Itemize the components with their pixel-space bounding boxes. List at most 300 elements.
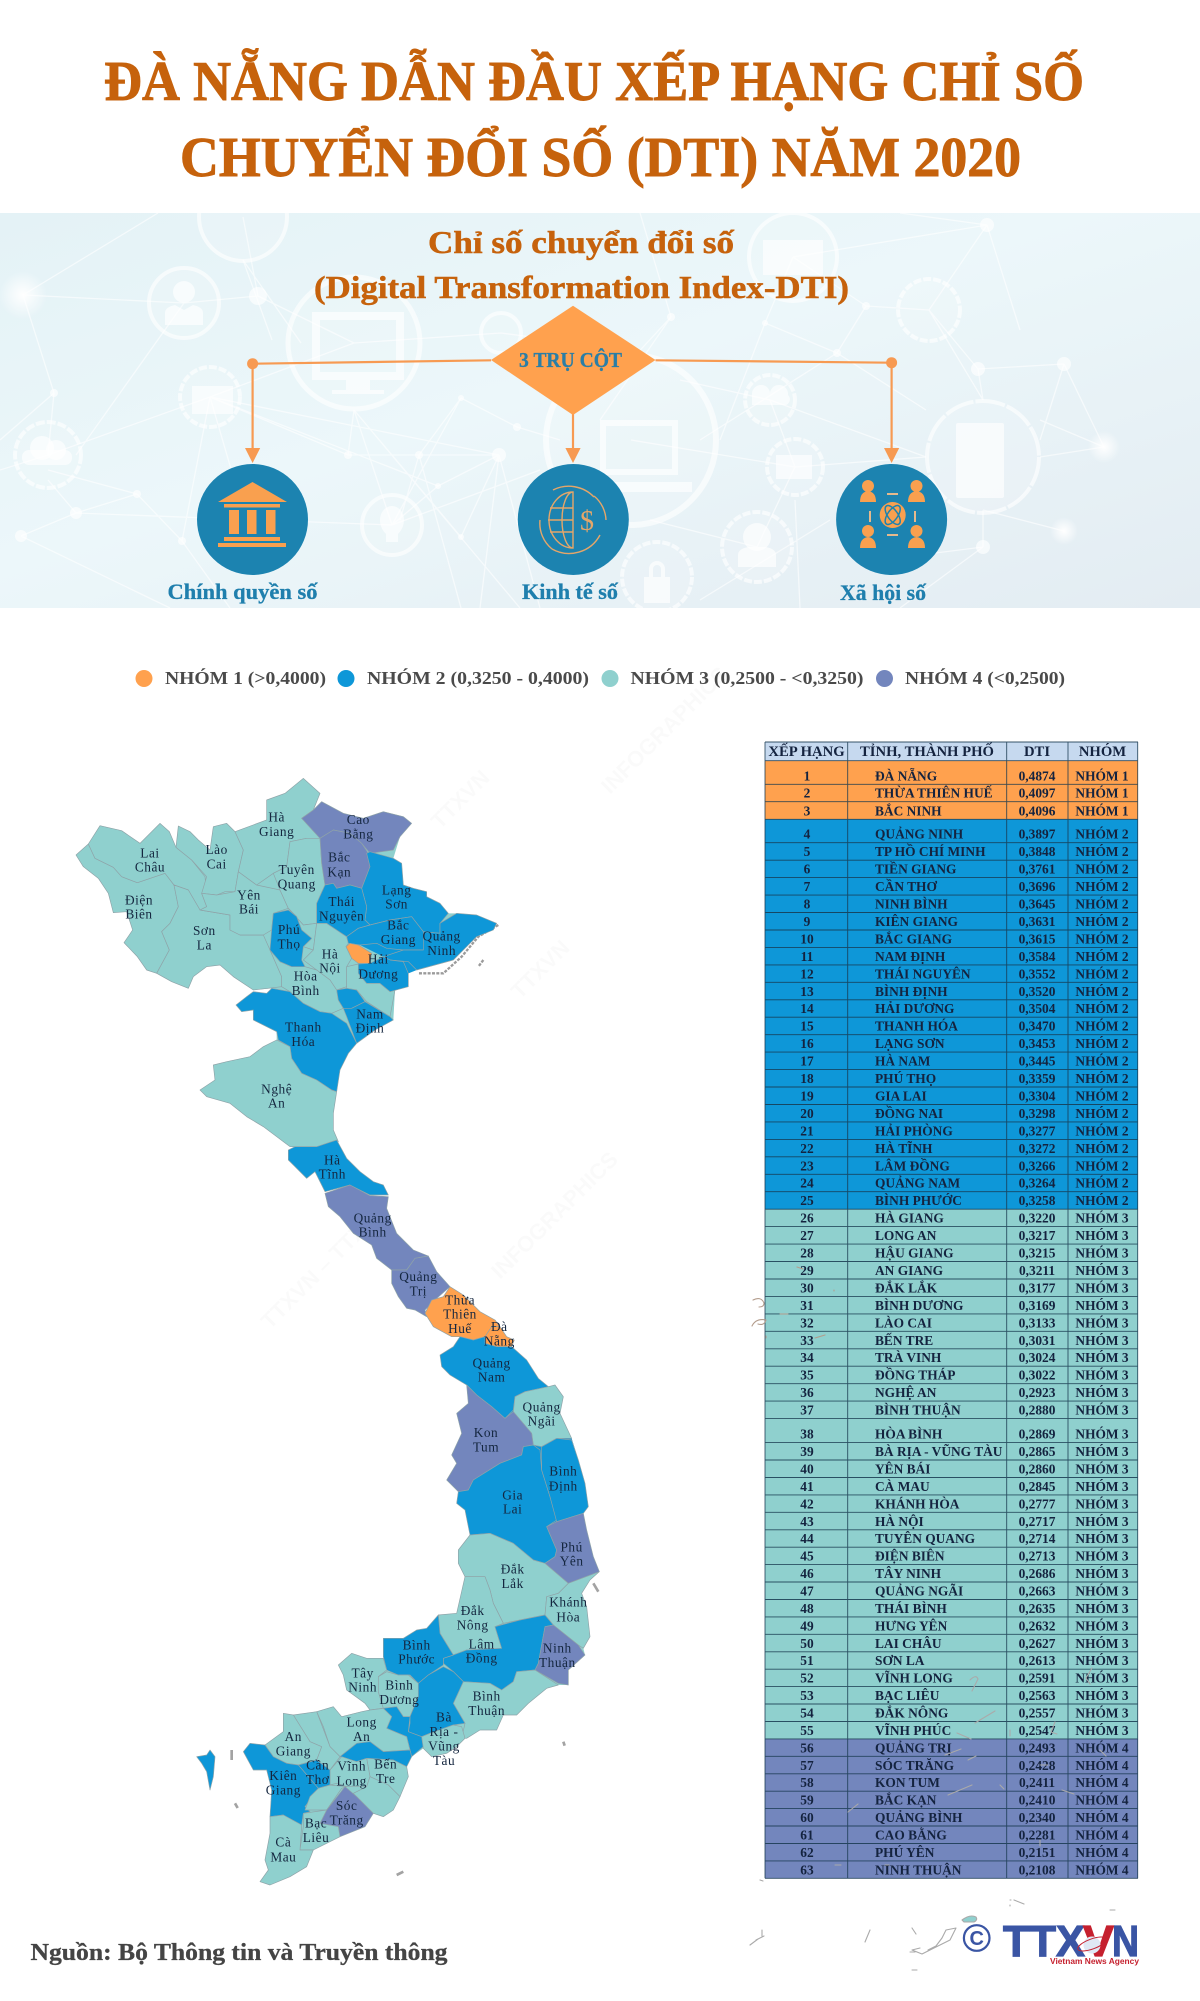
table rows: group 3: NHÓM 3 bbox=[1075, 1671, 1129, 1686]
subtitle: (Digital Transformation Index-DTI) bbox=[314, 269, 849, 305]
table rows: group 3: 37 bbox=[800, 1403, 814, 1418]
table rows: group 3: NHÓM 3 bbox=[1075, 1531, 1129, 1546]
map of Vietnam by province bbox=[76, 778, 599, 1885]
map labels: south: Bà bbox=[436, 1710, 452, 1725]
table rows: group 4: KON TUM bbox=[875, 1775, 940, 1790]
table rows: group 3: BẠC LIÊU bbox=[875, 1688, 940, 1703]
map labels: north: Kạn bbox=[327, 864, 351, 879]
table rows: group 2: NHÓM 2 bbox=[1075, 827, 1129, 842]
province: Tuyên Quang bbox=[273, 838, 325, 925]
table rows: group 2: NHÓM 2 bbox=[1075, 1176, 1129, 1191]
map labels: south: Tàu bbox=[433, 1753, 455, 1768]
table rows: group 2: 0,3761 bbox=[1019, 862, 1055, 877]
archipelago: Quảng Ninh islands bbox=[418, 925, 498, 973]
table rows: group 1: BẮC NINH bbox=[875, 803, 942, 818]
table rows: group 2: 0,3696 bbox=[1019, 879, 1056, 894]
table rows: group 3: 29 bbox=[800, 1263, 814, 1278]
map labels: centre bbox=[319, 1152, 584, 1569]
province: Hà Giang bbox=[235, 778, 320, 885]
table rows: group 2: 0,3631 bbox=[1019, 914, 1055, 929]
province: Hưng Yên, Thái Bình bbox=[347, 964, 395, 1017]
table rows: group 3: 35 bbox=[800, 1368, 814, 1383]
table rows: group 2: CẦN THƠ bbox=[875, 879, 937, 894]
watermarks: INFOGRAPHICS bbox=[596, 662, 733, 799]
table rows: group 2: LÂM ĐỒNG bbox=[875, 1158, 950, 1173]
province: TP Hồ Chí Minh bbox=[383, 1707, 423, 1757]
table rows: group 3: NHÓM 3 bbox=[1075, 1618, 1129, 1633]
province: Nghệ An bbox=[200, 1040, 338, 1148]
province: An Giang bbox=[265, 1713, 322, 1765]
table rows: group 2: NHÓM 2 bbox=[1075, 1106, 1129, 1121]
silhouette: Red River delta blue cluster bbox=[347, 913, 467, 992]
province: Cà Mau bbox=[260, 1815, 313, 1885]
table rows: group 3: 47 bbox=[800, 1584, 814, 1598]
subtitle bbox=[314, 224, 849, 305]
table rows: group 3: NHÓM 3 bbox=[1075, 1601, 1129, 1616]
silhouette: central landmass bbox=[447, 1385, 588, 1563]
map labels: south: Long bbox=[347, 1715, 377, 1730]
map labels: centre: Kon bbox=[474, 1425, 498, 1440]
map labels: south: Rịa - bbox=[430, 1724, 458, 1739]
table rows: group 3: 0,2591 bbox=[1019, 1671, 1055, 1686]
table rows: group 3: NGHỆ AN bbox=[875, 1385, 937, 1400]
table rows: group 1: 1 bbox=[804, 768, 810, 784]
table rows: group 3: LONG AN bbox=[875, 1228, 937, 1243]
province: Quảng Bình bbox=[325, 1185, 428, 1270]
map labels: centre: Thừa bbox=[445, 1292, 475, 1307]
map labels: north: Hà bbox=[268, 810, 285, 825]
islands: Hoàng Sa bbox=[752, 1267, 834, 1338]
table rows: group 2: NHÓM 2 bbox=[1075, 949, 1129, 964]
table rows: group 3: NHÓM 3 bbox=[1075, 1368, 1129, 1383]
table rows: group 3: NHÓM 3 bbox=[1075, 1315, 1129, 1330]
table rows: group 3: 53 bbox=[800, 1688, 814, 1703]
table rows: group 2: 20 bbox=[800, 1106, 814, 1121]
province: Khánh Hòa bbox=[545, 1572, 599, 1648]
table rows: group 3: NHÓM 3 bbox=[1075, 1653, 1129, 1668]
province: Trà Vinh bbox=[353, 1777, 400, 1817]
map labels: centre: Tĩnh bbox=[319, 1167, 346, 1182]
map labels: south: Đồng bbox=[466, 1651, 498, 1666]
map labels: south: Trăng bbox=[330, 1813, 364, 1828]
table rows: group 3: 0,2563 bbox=[1019, 1688, 1056, 1703]
map labels: north: Quang bbox=[278, 876, 316, 891]
table rows: group 2: HÀ TĨNH bbox=[875, 1141, 933, 1156]
table rows: group 1: THỪA THIÊN HUẾ bbox=[875, 786, 993, 801]
table rows: group 3: 36 bbox=[800, 1385, 814, 1400]
table rows: group 3: 45 bbox=[800, 1549, 814, 1564]
map labels: north: Bái bbox=[239, 902, 259, 917]
table rows: group 4: 58 bbox=[800, 1775, 814, 1790]
table rows: group 3: 54 bbox=[800, 1706, 814, 1720]
table rows: group 3: 0,3215 bbox=[1019, 1246, 1056, 1260]
map labels: centre: Lai bbox=[503, 1502, 522, 1517]
title bbox=[104, 47, 1084, 189]
table rows: group 3: LÀO CAI bbox=[875, 1315, 932, 1330]
province: Bình Phước bbox=[383, 1615, 453, 1683]
table rows: group 4: PHÚ YÊN bbox=[875, 1845, 935, 1860]
province: Hà Nội bbox=[303, 923, 352, 990]
table rows: group 2: 0,3304 bbox=[1019, 1088, 1056, 1104]
table rows: group 3: 33 bbox=[800, 1333, 814, 1348]
province: Đà Nẵng bbox=[485, 1327, 514, 1347]
table rows: group 3: LAI CHÂU bbox=[875, 1636, 942, 1651]
table rows: group 3: THÁI BÌNH bbox=[875, 1601, 947, 1616]
table backgrounds bbox=[765, 742, 1138, 1878]
table rows: group 4: 0,2281 bbox=[1019, 1828, 1055, 1842]
table rows: group 3: NHÓM 3 bbox=[1075, 1350, 1129, 1365]
pillar: Kinh tế số: Kinh tế số bbox=[522, 579, 619, 604]
table rows: group 2: 13 bbox=[800, 984, 814, 999]
province: Hải Dương, Hải Phòng bbox=[358, 957, 408, 992]
map labels: south: Long bbox=[337, 1773, 367, 1788]
table rows: group 2: TIỀN GIANG bbox=[875, 862, 957, 877]
table rows: group 3: 0,2714 bbox=[1019, 1531, 1056, 1546]
table rows: group 3: 28 bbox=[800, 1246, 814, 1260]
table rows: group 2: 0,3645 bbox=[1019, 896, 1056, 912]
table rows: group 2: QUẢNG NAM bbox=[875, 1176, 961, 1191]
table rows: group 3: 0,3220 bbox=[1019, 1211, 1056, 1226]
map labels: south: Hòa bbox=[556, 1609, 580, 1624]
table rows: group 2: 0,3615 bbox=[1019, 931, 1056, 946]
legend: NHÓM 4 (<0,2500) bbox=[905, 667, 1065, 689]
table rows: group 2: 18 bbox=[800, 1071, 814, 1086]
table rows: group 4: NHÓM 4 bbox=[1075, 1828, 1129, 1842]
province: Cần Thơ bbox=[298, 1760, 330, 1788]
table rows: group 3: KHÁNH HÒA bbox=[875, 1496, 960, 1511]
province: Quảng Ngãi bbox=[513, 1385, 572, 1447]
watermarks: TTXVN – TTXVN bbox=[256, 1197, 393, 1334]
table rows: group 3: NHÓM 3 bbox=[1075, 1211, 1129, 1226]
table rows: group 4: 0,2428 bbox=[1019, 1758, 1056, 1773]
logo: TTXVN: C bbox=[969, 1928, 984, 1950]
map: southern provinces bbox=[197, 1533, 599, 1885]
map labels: south: Sóc bbox=[336, 1798, 357, 1813]
pillar: Chính quyền số: Chính quyền số bbox=[168, 579, 319, 604]
table rows: group 3: 0,3031 bbox=[1019, 1333, 1055, 1348]
table rows: group 2: 4 bbox=[804, 827, 811, 842]
province: Phú Yên bbox=[545, 1513, 599, 1583]
table rows: group 1: 0,4874 bbox=[1019, 768, 1056, 784]
table rows: group 3: 0,2627 bbox=[1019, 1636, 1056, 1651]
table rows: group 2: 0,3552 bbox=[1019, 966, 1056, 981]
table rows: group 1: NHÓM 1 bbox=[1075, 768, 1129, 784]
table rows: group 1: 2 bbox=[804, 786, 811, 801]
table rows: group 4: 0,2493 bbox=[1019, 1740, 1056, 1755]
pillar: Kinh tế số: $ bbox=[580, 506, 594, 537]
map labels: south: Ninh bbox=[348, 1680, 377, 1695]
table rows: group 3: 40 bbox=[800, 1462, 814, 1476]
table rows: group 3: NHÓM 3 bbox=[1075, 1333, 1129, 1348]
table rows: group 4: NHÓM 4 bbox=[1075, 1862, 1129, 1877]
map labels: south: Vũng bbox=[428, 1739, 460, 1754]
map labels: centre: Đà bbox=[491, 1319, 508, 1334]
connector lines and arrows bbox=[245, 357, 899, 463]
pillar: Xã hội số: Xã hội số bbox=[840, 580, 927, 605]
table rows: group 2: 8 bbox=[804, 896, 811, 912]
map labels: north: Điện bbox=[125, 892, 153, 907]
table rows: group 2: 0,3298 bbox=[1019, 1106, 1056, 1121]
map labels: centre: Quảng bbox=[354, 1210, 392, 1225]
map labels: north: Dương bbox=[358, 966, 398, 981]
table rows: group 2: THÁI NGUYÊN bbox=[875, 966, 971, 981]
map labels: south: Liêu bbox=[303, 1830, 329, 1845]
map labels: centre: Quảng bbox=[473, 1355, 511, 1370]
table rows: group 1: ĐÀ NẴNG bbox=[875, 768, 938, 784]
table rows: group 2: 0,3520 bbox=[1019, 984, 1056, 999]
map labels: centre: Hà bbox=[324, 1152, 341, 1167]
table rows: group 1: 0,4097 bbox=[1019, 786, 1056, 801]
map labels: north: Hóa bbox=[291, 1034, 315, 1049]
map labels: north: Bắc bbox=[387, 917, 409, 932]
silhouette: southern landmass bbox=[243, 1533, 599, 1885]
table rows: group 3: QUẢNG NGÃI bbox=[875, 1584, 963, 1598]
map labels: south: Lắk bbox=[501, 1576, 524, 1591]
table rows: group 3: 0,2845 bbox=[1019, 1479, 1056, 1494]
map labels: north: Yên bbox=[237, 887, 261, 902]
table header: DTI bbox=[1024, 744, 1050, 760]
table rows: group 3: 30 bbox=[800, 1280, 814, 1295]
map labels: south: Bình bbox=[403, 1637, 431, 1652]
legend bbox=[136, 667, 1065, 689]
table rows: group 3: 0,2613 bbox=[1019, 1653, 1056, 1668]
province: Đắk Nông bbox=[438, 1577, 503, 1655]
map labels: south: Đắk bbox=[501, 1562, 525, 1577]
table rows: group 2: 0,3848 bbox=[1019, 844, 1056, 859]
map labels: north: Thanh bbox=[285, 1020, 322, 1035]
table rows: group 3: 49 bbox=[800, 1618, 814, 1633]
table rows: group 3: SƠN LA bbox=[875, 1653, 925, 1668]
island: Phú Quốc bbox=[197, 1750, 215, 1790]
table rows: group 2: 0,3258 bbox=[1019, 1193, 1056, 1208]
province: Tiền Giang bbox=[340, 1742, 412, 1767]
map labels: north: Cao bbox=[347, 812, 370, 827]
map labels: north: Sơn bbox=[385, 896, 408, 911]
pillar: Xã hội số bbox=[836, 464, 947, 605]
table rows: group 2: NHÓM 2 bbox=[1075, 1123, 1129, 1138]
map labels: centre: Thiên bbox=[443, 1307, 477, 1322]
map labels: south: Phước bbox=[398, 1652, 435, 1667]
table rows: group 3: 0,2635 bbox=[1019, 1601, 1056, 1616]
table rows: group 4: QUẢNG TRỊ bbox=[875, 1740, 952, 1755]
map labels: north: Nam bbox=[356, 1006, 384, 1021]
province: Vĩnh Phúc bbox=[288, 908, 317, 950]
map labels: north: Ninh bbox=[427, 943, 456, 958]
map labels: north: Hải bbox=[368, 952, 389, 967]
table rows: group 3: AN GIANG bbox=[875, 1263, 944, 1278]
map labels: south: Nông bbox=[457, 1617, 489, 1632]
map labels: centre: Ngãi bbox=[528, 1414, 556, 1429]
table rows: group 2: NHÓM 2 bbox=[1075, 1036, 1129, 1051]
table rows: group 2: 0,3584 bbox=[1019, 949, 1056, 964]
table rows: group 3: NHÓM 3 bbox=[1075, 1228, 1129, 1243]
table rows: group 3: TUYÊN QUANG bbox=[875, 1531, 976, 1546]
table rows: group 3: NHÓM 3 bbox=[1075, 1403, 1129, 1418]
table rows: group 3: NHÓM 3 bbox=[1075, 1444, 1129, 1459]
map labels: centre: Nẵng bbox=[484, 1334, 515, 1349]
table rows: group 3: NHÓM 3 bbox=[1075, 1496, 1129, 1511]
map labels: north: Quảng bbox=[423, 929, 461, 944]
table rows: group 3: 0,2865 bbox=[1019, 1444, 1056, 1459]
map labels: south: Giang bbox=[266, 1782, 301, 1797]
table rows: group 3: 0,2547 bbox=[1019, 1723, 1056, 1738]
table rows: group 3: VĨNH LONG bbox=[875, 1671, 953, 1686]
table rows: group 2: 0,3266 bbox=[1019, 1158, 1056, 1173]
table rows: group 4: NHÓM 4 bbox=[1075, 1845, 1129, 1860]
table rows: group 2: 24 bbox=[800, 1176, 814, 1191]
table rows: group 4: BẮC KẠN bbox=[875, 1793, 937, 1808]
table rows: group 4: 0,2108 bbox=[1019, 1862, 1056, 1877]
province: Bắc Ninh bbox=[346, 943, 372, 963]
table rows: group 3: NHÓM 3 bbox=[1075, 1566, 1129, 1581]
map labels: north: Lạng bbox=[382, 882, 411, 897]
table rows: group 3: 51 bbox=[800, 1653, 814, 1668]
table rows: group 2: NHÓM 2 bbox=[1075, 931, 1129, 946]
map labels: centre: Trị bbox=[410, 1284, 427, 1299]
watermarks bbox=[256, 662, 733, 1334]
table rows: group 3: 0,2686 bbox=[1019, 1566, 1056, 1581]
table rows: group 3: VĨNH PHÚC bbox=[875, 1723, 951, 1738]
table rows: group 2: NHÓM 2 bbox=[1075, 1088, 1129, 1104]
map labels: north: Lào bbox=[206, 842, 228, 857]
map labels: north: Phú bbox=[278, 922, 300, 937]
province: Nam Định, Ninh Bình bbox=[343, 1002, 393, 1043]
table rows: group 2: 5 bbox=[804, 844, 811, 859]
table rows: group 3: 0,2713 bbox=[1019, 1549, 1056, 1564]
table rows: group 3: BÌNH THUẬN bbox=[875, 1403, 961, 1418]
table rows: group 2: 23 bbox=[800, 1158, 814, 1173]
legend: NHÓM 2 (0,3250 - 0,4000) bbox=[367, 667, 589, 689]
table rows: group 2: NHÓM 2 bbox=[1075, 844, 1129, 859]
table rows: group 2: LẠNG SƠN bbox=[875, 1036, 945, 1051]
table rows: group 2: NINH BÌNH bbox=[875, 896, 948, 912]
map labels: north: Châu bbox=[135, 860, 165, 875]
map labels: north: Hòa bbox=[294, 969, 318, 984]
table rows: group 2: 25 bbox=[800, 1193, 814, 1208]
table rows: group 3: NHÓM 3 bbox=[1075, 1479, 1129, 1494]
table rows: group 3: 38 bbox=[800, 1427, 814, 1442]
map labels: south: Bến bbox=[374, 1757, 397, 1772]
table rows: group 4: NHÓM 4 bbox=[1075, 1758, 1129, 1773]
table rows: group 2: 12 bbox=[800, 966, 814, 981]
table rows: group 3: ĐIỆN BIÊN bbox=[875, 1549, 945, 1564]
table rows: group 3: NHÓM 3 bbox=[1075, 1549, 1129, 1564]
table rows: group 3: YÊN BÁI bbox=[875, 1462, 930, 1476]
table rows: group 3: 44 bbox=[800, 1531, 814, 1546]
table rows: group 2: HẢI PHÒNG bbox=[875, 1123, 953, 1138]
table rows: group 3: NHÓM 3 bbox=[1075, 1280, 1129, 1295]
diamond: 3 trụ cột bbox=[491, 306, 656, 415]
map labels: north: Hà bbox=[322, 946, 338, 961]
province: Quảng Trị bbox=[392, 1256, 450, 1317]
map labels: north bbox=[125, 810, 461, 1111]
province: Sơn La bbox=[157, 885, 282, 990]
table rows: group 2: 22 bbox=[800, 1141, 814, 1156]
table rows: group 3: 0,2717 bbox=[1019, 1514, 1056, 1529]
table rows: group 3: 0,2663 bbox=[1019, 1584, 1056, 1598]
table rows: group 2: 10 bbox=[800, 931, 814, 946]
map labels: north: Tuyên bbox=[279, 862, 315, 877]
province: Hậu Giang bbox=[305, 1785, 347, 1810]
table rows: group 2: 16 bbox=[800, 1036, 814, 1051]
logo: TTXVN bbox=[964, 1917, 1139, 1966]
table rows: group 4: 0,2151 bbox=[1019, 1845, 1055, 1860]
map labels: north: Biên bbox=[125, 906, 153, 921]
table rows: group 2: 0,3504 bbox=[1019, 1001, 1056, 1016]
map labels: north: Sơn bbox=[193, 923, 216, 938]
table rows: group 2: 0,3277 bbox=[1019, 1123, 1056, 1138]
map labels: north: Thái bbox=[328, 894, 355, 909]
map: central provinces bbox=[288, 1140, 599, 1583]
province: Bình Định bbox=[542, 1438, 588, 1522]
table rows: group 2: NHÓM 2 bbox=[1075, 1158, 1129, 1173]
table rows: group 2: 0,3453 bbox=[1019, 1036, 1056, 1051]
table rows: group 3: 55 bbox=[800, 1723, 814, 1738]
table header: NHÓM bbox=[1079, 743, 1126, 760]
table rows: group 2: 0,3897 bbox=[1019, 827, 1056, 842]
table rows: group 4: 0,2410 bbox=[1019, 1793, 1056, 1808]
ranking table bbox=[765, 742, 1138, 1878]
table rows: group 3: NHÓM 3 bbox=[1075, 1263, 1129, 1278]
table rows: group 2: NHÓM 2 bbox=[1075, 1141, 1129, 1156]
table rows: group 3: BÌNH DƯƠNG bbox=[875, 1298, 964, 1313]
map labels: south: Tre bbox=[376, 1771, 395, 1786]
table rows: group 2: 17 bbox=[800, 1054, 814, 1069]
table rows: group 3: NHÓM 3 bbox=[1075, 1584, 1129, 1598]
table rows: group 3: 0,2869 bbox=[1019, 1427, 1056, 1442]
table rows: group 3: 48 bbox=[800, 1601, 814, 1616]
table rows: group 2: 11 bbox=[801, 949, 813, 964]
map labels: south: Bình bbox=[385, 1677, 413, 1692]
table rows: group 1: 3 bbox=[804, 803, 811, 818]
pillar: Chính quyền số bbox=[168, 464, 319, 604]
table rows: group 2: NHÓM 2 bbox=[1075, 1019, 1129, 1034]
table rows: group 3: 32 bbox=[800, 1315, 814, 1330]
table rows: group 4: 60 bbox=[800, 1810, 814, 1825]
map labels: centre: Nam bbox=[478, 1369, 506, 1384]
map labels: south: Thơ bbox=[306, 1772, 330, 1787]
table rows: group 2: BÌNH ĐỊNH bbox=[875, 984, 948, 999]
map labels: north: La bbox=[197, 937, 212, 952]
table rows: group 4: 56 bbox=[800, 1740, 814, 1755]
map labels: centre: Bình bbox=[549, 1464, 577, 1479]
table rows: group 4: 0,2340 bbox=[1019, 1810, 1056, 1825]
province: Bến Tre bbox=[367, 1758, 408, 1797]
logo: TTXVN: Vietnam News Agency bbox=[1050, 1956, 1139, 1966]
map labels: centre: Huế bbox=[448, 1321, 472, 1336]
table rows: group 3: NHÓM 3 bbox=[1075, 1636, 1129, 1651]
table rows: group 3: HÀ NỘI bbox=[875, 1514, 924, 1529]
province: Đồng Nai bbox=[408, 1667, 465, 1737]
map labels: centre: Yên bbox=[560, 1554, 584, 1569]
table rows: group 4: 62 bbox=[800, 1845, 814, 1860]
logo: TTXVN: TTX bbox=[1003, 1917, 1085, 1966]
table header: TỈNH, THÀNH PHỐ bbox=[860, 742, 994, 760]
table rows: group 4: NHÓM 4 bbox=[1075, 1740, 1129, 1755]
table rows: group 2: NAM ĐỊNH bbox=[875, 949, 946, 964]
map labels: north: Bằng bbox=[343, 826, 373, 841]
province: Bình Thuận bbox=[453, 1670, 558, 1738]
table rows: group 2: 9 bbox=[804, 914, 811, 929]
map labels: centre: Phú bbox=[560, 1539, 583, 1554]
watermarks: TTXVN bbox=[426, 765, 495, 834]
table rows: group 3: 0,3022 bbox=[1019, 1368, 1056, 1383]
map labels: south: An bbox=[353, 1729, 370, 1744]
source: Nguồn: Bộ Thông tin và Truyền thông bbox=[30, 1940, 447, 1966]
table rows: group 1: NHÓM 1 bbox=[1075, 786, 1129, 801]
map labels: south: Mau bbox=[270, 1849, 296, 1864]
table rows: group 2: NHÓM 2 bbox=[1075, 966, 1129, 981]
